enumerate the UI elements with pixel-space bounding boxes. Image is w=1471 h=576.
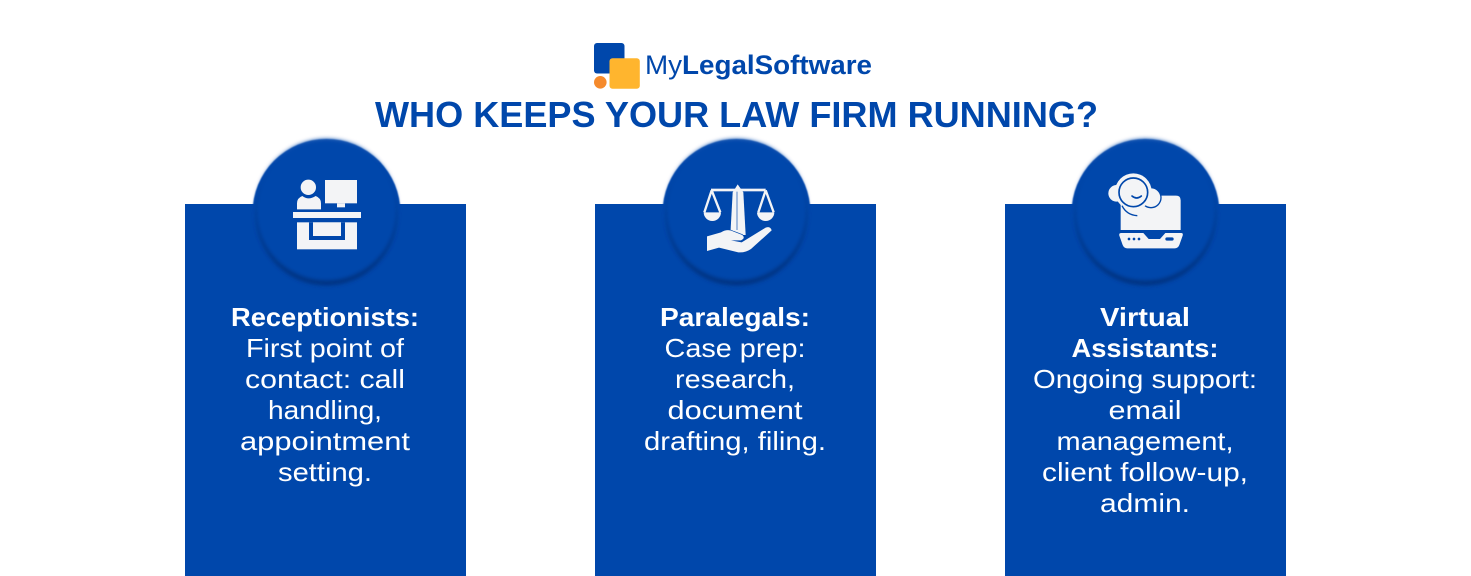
logo: orange dot: [594, 76, 607, 89]
panel text: paralegals: Case prep:: [664, 333, 806, 363]
icon badge: headset and laptop: [1072, 139, 1220, 287]
panel text: receptionists: contact: call: [245, 364, 405, 394]
panel text: virtual assistants: email: [1108, 395, 1182, 425]
logo: blue square: [594, 43, 624, 74]
panel text: virtual assistants: client follow-up,: [1042, 457, 1248, 487]
logo: [594, 43, 872, 89]
panel text: paralegals: document: [668, 395, 803, 425]
panel background: [595, 204, 876, 576]
panel text: paralegals: drafting, filing.: [644, 426, 826, 456]
icon badge: scales and hand: [662, 139, 810, 287]
panel text: receptionists: appointment: [240, 426, 411, 456]
panel text: virtual assistants: [1033, 302, 1257, 518]
panel text: paralegals: [644, 302, 826, 456]
panel text: paralegals: research,: [675, 364, 795, 394]
title: WHO KEEPS YOUR LAW FIRM RUNNING?: [375, 94, 1098, 135]
panel text: virtual assistants: Ongoing support:: [1033, 364, 1257, 394]
panel: receptionists: [185, 139, 466, 576]
panel: paralegals: [595, 139, 876, 576]
panel: virtual assistants: [1005, 139, 1286, 576]
panel text: virtual assistants: admin.: [1100, 488, 1190, 518]
panel text: virtual assistants: Virtual: [1100, 302, 1190, 332]
panel text: receptionists: [231, 302, 419, 487]
panel background: [185, 204, 466, 576]
panel text: receptionists: setting.: [278, 457, 372, 487]
panel background: [1005, 204, 1286, 576]
logo: yellow square: [610, 58, 640, 89]
panel text: virtual assistants: management,: [1056, 426, 1234, 456]
panel text: receptionists: Receptionists:: [231, 302, 419, 332]
logo: wordmark: MyLegalSoftware: [645, 50, 872, 80]
panel text: virtual assistants: Assistants:: [1072, 333, 1218, 363]
icon badge: receptionist desk: [252, 139, 400, 287]
panel text: paralegals: Paralegals:: [660, 302, 810, 332]
panel text: receptionists: First point of: [246, 333, 405, 363]
panel text: receptionists: handling,: [268, 395, 382, 425]
